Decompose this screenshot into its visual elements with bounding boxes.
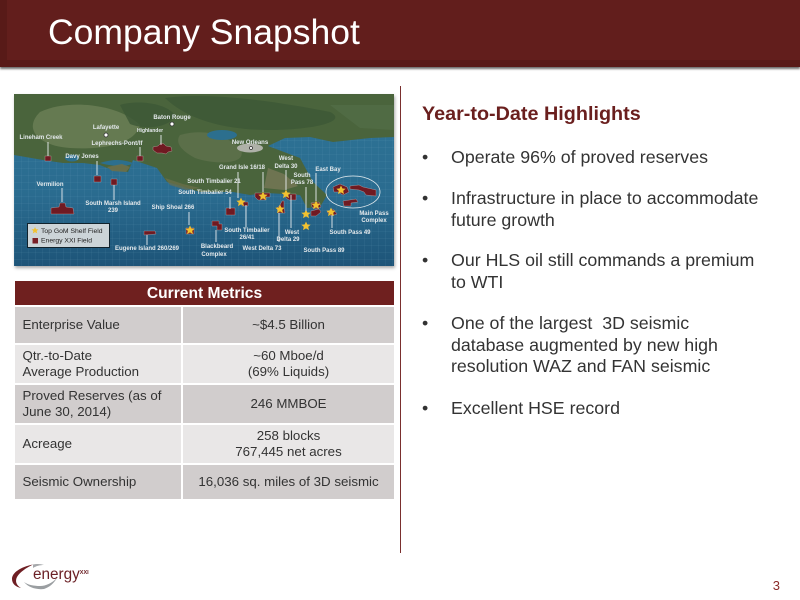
- table heading: [15, 281, 394, 305]
- map labels: Delta 30: [274, 164, 298, 170]
- row: acreage: [15, 425, 394, 463]
- row: proved reserves: 246 MMBOE: [250, 396, 327, 411]
- bullet list: One of the largest 3D seismic: [451, 313, 689, 333]
- map labels: Delta 29: [276, 237, 300, 243]
- bullet list: •: [422, 313, 428, 333]
- fields: [45, 135, 380, 245]
- logo swoosh: [12, 564, 57, 590]
- Main Pass ellipse: [326, 176, 380, 208]
- bullet 4: [422, 313, 718, 376]
- row: production: Qtr.-to-Date: [22, 348, 92, 362]
- map labels: Lineham Creek: [19, 135, 63, 141]
- map labels: Vermilion: [36, 182, 64, 188]
- row: seismic: 16,036 sq. miles of 3D seismic: [198, 474, 379, 489]
- map labels: South Timbalier: [224, 228, 270, 234]
- map labels: West Delta 73: [243, 246, 282, 252]
- row: proved reserves: June 30, 2014): [22, 404, 111, 419]
- bullet list: •: [422, 398, 428, 418]
- map labels: Ship Shoal 266: [152, 205, 195, 211]
- map labels: Blackbeard: [201, 244, 234, 250]
- map labels: East Bay: [315, 167, 341, 173]
- map labels: West: [279, 156, 293, 162]
- bullet list: •: [422, 250, 428, 270]
- city: New Orleans marker: [250, 146, 252, 150]
- map labels: Main Pass: [359, 211, 389, 217]
- bullet 1: [422, 147, 708, 167]
- bullet 5: [422, 398, 620, 418]
- map labels: South Timbalier 21: [187, 179, 241, 185]
- map legend: [28, 224, 110, 248]
- header band: [0, 0, 800, 67]
- map labels: Eugene Island 260/269: [115, 246, 180, 252]
- row: proved reserves: [15, 385, 394, 423]
- map labels: Complex: [201, 252, 227, 258]
- city: Baton Rouge marker: [170, 122, 174, 126]
- bullet list: [422, 147, 758, 418]
- bullet 3: [422, 250, 754, 292]
- bullet list: •: [422, 147, 428, 167]
- map legend: Energy XXI Field: [41, 238, 92, 244]
- panel: current metrics table: [15, 281, 394, 499]
- logo wordmark: energyXXI: [33, 566, 89, 583]
- map labels: South Pass 89: [303, 248, 345, 254]
- map labels: West: [285, 230, 299, 236]
- map labels: Baton Rouge: [153, 115, 191, 121]
- coastal water: [207, 130, 237, 140]
- header inner panel: [7, 0, 800, 60]
- row: acreage: 258 blocks: [257, 428, 320, 442]
- table heading: Current Metrics: [147, 285, 262, 302]
- bullet list: Operate 96% of proved reserves: [451, 147, 708, 167]
- row: enterprise value: ~$4.5 Billion: [252, 317, 325, 332]
- map labels: [19, 115, 389, 258]
- city: Lafayette marker: [104, 133, 108, 137]
- map labels: South Timbalier 54: [178, 190, 232, 196]
- bullet 2: [422, 188, 758, 230]
- bullet list: Excellent HSE record: [451, 398, 620, 418]
- map labels: 239: [108, 208, 119, 214]
- row: seismic: Seismic Ownership: [22, 474, 136, 489]
- bullet list: Our HLS oil still commands a premium: [451, 250, 754, 270]
- divider: [400, 86, 401, 553]
- map labels: Davy Jones: [65, 154, 99, 160]
- city: New Orleans: [237, 144, 263, 152]
- bullet list: to WTI: [451, 272, 503, 292]
- bullet list: •: [422, 188, 428, 208]
- row: production: ~60 Mboe/d: [253, 348, 324, 362]
- map labels: Lafayette: [93, 125, 120, 131]
- map labels: South: [294, 173, 311, 179]
- map: [14, 94, 394, 266]
- map labels: Complex: [361, 218, 387, 224]
- row: proved reserves: Proved Reserves (as of: [22, 388, 161, 402]
- map legend: Top GoM Shelf Field: [41, 228, 103, 235]
- map labels: South Pass 49: [329, 230, 371, 236]
- land: [14, 94, 394, 208]
- map labels: South Marsh Island: [85, 201, 141, 207]
- bullet list: resolution WAZ and FAN seismic: [451, 356, 710, 376]
- map labels: Highlander: [137, 128, 163, 134]
- bullet list: future growth: [451, 210, 555, 230]
- row: acreage: Acreage: [22, 436, 72, 451]
- map labels: New Orleans: [232, 140, 269, 146]
- leader lines: [48, 135, 332, 245]
- field stars: [185, 186, 346, 234]
- map labels: 26/41: [239, 235, 255, 241]
- map labels: Lephrechs-Pont/If: [91, 141, 143, 147]
- logo: energy XXI: [12, 564, 89, 590]
- bullet list: Infrastructure in place to accommodate: [451, 188, 758, 208]
- row: seismic: [15, 465, 394, 499]
- highlights heading: Year-to-Date Highlights: [422, 103, 641, 125]
- row: enterprise value: Enterprise Value: [22, 317, 120, 332]
- map labels: Grand Isle 16/18: [219, 165, 266, 171]
- title: Company Snapshot: [48, 12, 360, 52]
- bullet list: database augmented by new high: [451, 334, 718, 354]
- row: production: Average Production: [22, 364, 139, 379]
- row: production: (69% Liquids): [248, 364, 329, 379]
- row: production: [15, 345, 394, 383]
- row: enterprise value: [15, 307, 394, 343]
- page number: 3: [773, 578, 780, 593]
- map labels: Pass 78: [291, 180, 314, 186]
- row: acreage: 767,445 net acres: [235, 444, 342, 459]
